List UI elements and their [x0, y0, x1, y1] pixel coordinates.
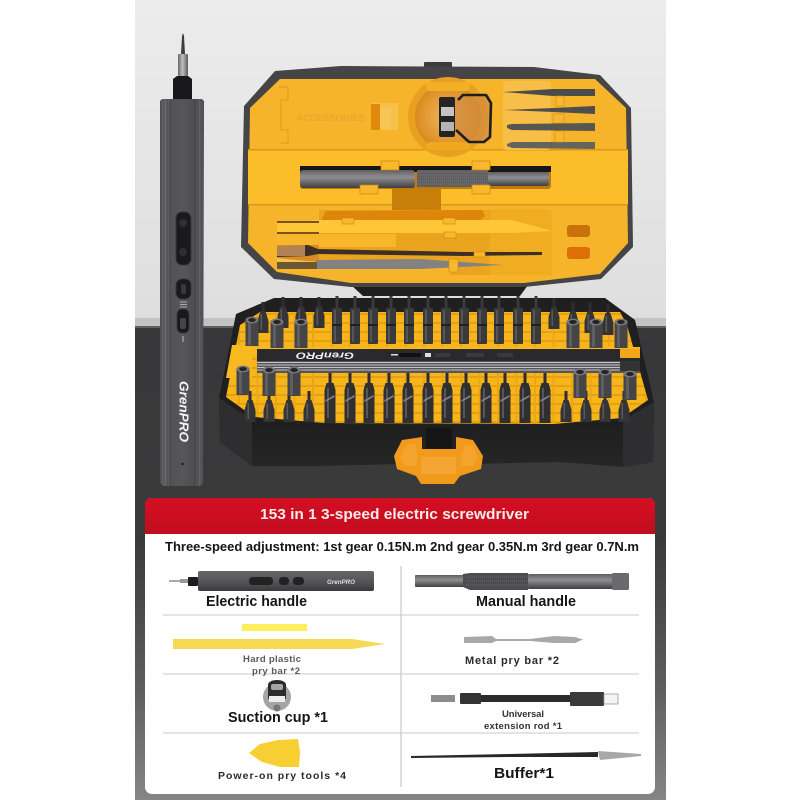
yellow case clasp — [394, 428, 483, 484]
small recess — [371, 103, 398, 130]
item: universal extension rod — [431, 692, 618, 732]
open case tray — [219, 296, 654, 484]
item: manual handle — [415, 573, 629, 610]
accessory compartment outline — [279, 87, 288, 143]
tray top frame — [219, 298, 654, 426]
item: metal pry bar: Metal pry bar *2 — [465, 655, 559, 667]
item: manual handle: Manual handle — [476, 593, 576, 610]
info card — [145, 498, 655, 794]
open case lid — [241, 62, 633, 296]
item: buffer tweezers: Buffer*1 — [494, 765, 554, 782]
item: hard plastic pry bar: Hard plastic — [243, 654, 301, 665]
red title banner — [145, 498, 655, 534]
lower lid recess with tools — [277, 210, 552, 275]
manual handle in lid — [300, 161, 551, 210]
speed subtitle: Three-speed adjustment: 1st gear 0.15N.m 2nd gear 0.35N.m 3rd gear 0.7N.m — [165, 539, 639, 554]
suction cup recess — [408, 77, 492, 157]
item: electric handle: GrenPRO — [327, 579, 355, 586]
item: hard plastic pry bar — [173, 624, 385, 677]
precision bit compartment — [503, 81, 595, 150]
item: metal pry bar — [464, 636, 583, 667]
item: suction cup: Suction cup *1 — [228, 709, 328, 726]
upper row bits — [246, 296, 628, 348]
screwdriver brand: GrenPRO — [176, 381, 190, 442]
electric screwdriver product image — [160, 33, 204, 486]
item: power-on pry tools — [218, 739, 346, 782]
item: hard plastic pry bar: pry bar *2 — [252, 666, 300, 677]
red title banner: 153 in 1 3-speed electric screwdriver — [260, 506, 529, 523]
item: electric handle: Electric handle — [206, 593, 307, 610]
item: universal extension rod: extension rod *1 — [484, 721, 563, 732]
item: universal extension rod: Universal — [502, 709, 544, 720]
tray front wall — [219, 398, 654, 467]
item: suction cup — [228, 680, 328, 726]
tray handle brand: GrenPRO — [295, 350, 354, 361]
lower row bits — [236, 366, 636, 423]
item: electric handle — [169, 571, 374, 610]
aluminium handle in tray — [257, 349, 640, 373]
accessories label: ACCESSORIES — [296, 113, 365, 124]
item: power-on pry tools: Power-on pry tools *4 — [218, 770, 346, 782]
item: buffer tweezers — [411, 751, 641, 782]
lid yellow interior — [248, 79, 628, 283]
side slots — [567, 225, 590, 259]
tray yellow bed — [226, 312, 648, 424]
background panel — [135, 0, 666, 800]
screwdriver buttons — [176, 212, 191, 342]
